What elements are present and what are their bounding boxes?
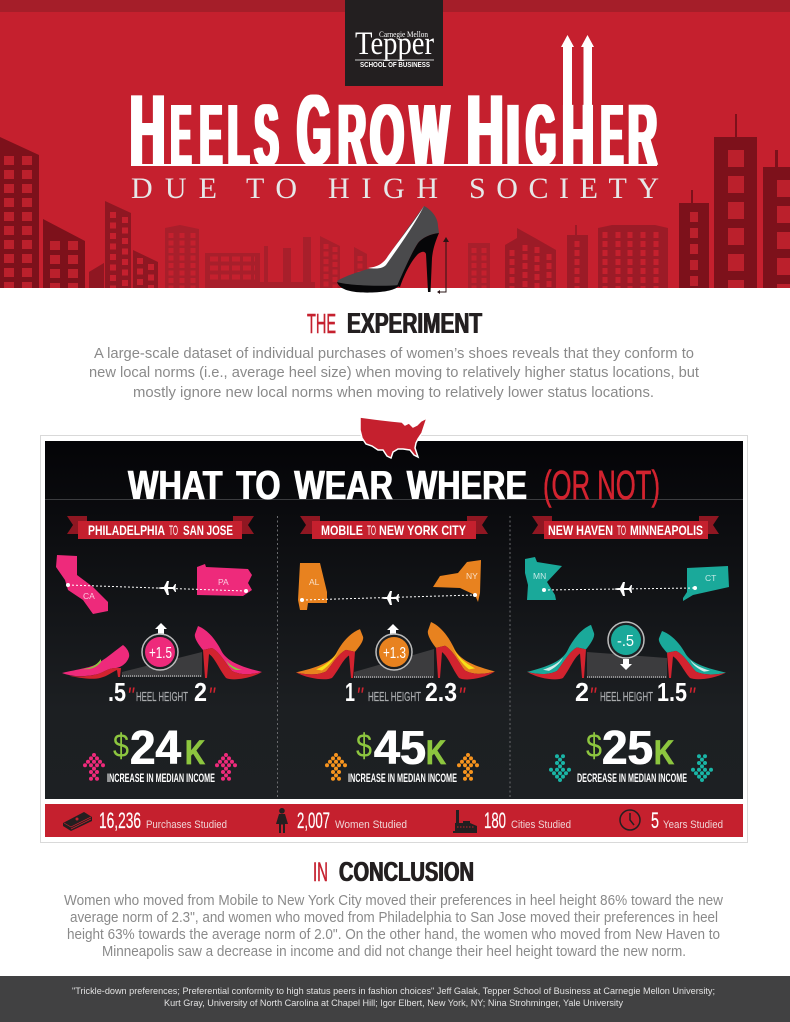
- text block: conclusion: average norm of 2.3", and women who moved from Philadelphia to San Jose moved their preferences in heel: [70, 910, 718, 926]
- title: Heels Grow Higher: E: [171, 87, 191, 184]
- stat: $25K decrease: K: [654, 734, 674, 772]
- stat: cities: 180: [484, 808, 506, 833]
- heel height: 2 to 1.5: 1.5: [657, 677, 687, 707]
- stat: $25K decrease: DECREASE IN MEDIAN INCOME: [577, 771, 687, 785]
- column 2: Mobile to New York City: [296, 516, 495, 785]
- icon: lower orange shoe: [296, 629, 363, 679]
- badge: +1.5: [142, 623, 178, 670]
- ribbon: New Haven to Minneapolis: MINNEAPOLIS: [630, 522, 703, 538]
- heading: In Conclusion: IN: [313, 857, 328, 887]
- ribbon: Mobile to New York City: MOBILE: [321, 522, 363, 538]
- footer: citation: Kurt Gray, University of North Carolina at Chapel Hill; Igor Elbert, New York, NY; Nina Strohminger, Yale University: [164, 998, 623, 1009]
- heel height: .5 to 2: 2: [194, 677, 207, 707]
- stat: $45K increase: INCREASE IN MEDIAN INCOME: [348, 771, 457, 785]
- icon: tall orange shoe: [428, 622, 495, 679]
- stat: $24K increase: 24: [130, 722, 181, 775]
- text block: conclusion: [64, 893, 723, 960]
- heel height: .5 to 2: ": [208, 683, 216, 710]
- stat: $45K increase: [327, 722, 477, 785]
- header banner: R: [628, 87, 657, 184]
- heel height: 2 to 1.5: [575, 677, 696, 710]
- chart: heel height ramp down: [587, 652, 667, 678]
- heel height: 1 to 2.3: 1: [345, 677, 355, 707]
- heel height: .5 to 2: .5: [108, 677, 126, 707]
- title: Heels Grow Higher: H: [467, 75, 504, 187]
- map: Alabama to New York route: [298, 560, 481, 610]
- heel height: .5 to 2: ": [127, 683, 135, 710]
- ribbon: Mobile to New York City: [300, 516, 488, 539]
- text block: experiment description: A large-scale dataset of individual purchases of women’s shoes reveals that they conform to: [94, 345, 694, 362]
- icon: tall pink shoe: [195, 626, 262, 679]
- map: Alabama to New York route: NY: [466, 571, 478, 581]
- text block: experiment description: new local norms (i.e., average heel size) when moving to relatively higher status locations, but: [89, 364, 700, 381]
- icon: double arrows rising from the H: [561, 35, 594, 165]
- footer: citation: [0, 976, 790, 1022]
- heel height: 2 to 1.5: ": [688, 683, 696, 710]
- chart: heel height ramp up: [354, 649, 434, 678]
- heading: In Conclusion: [313, 856, 474, 887]
- heel height: 2 to 1.5: ": [589, 683, 597, 710]
- ribbon: New Haven to Minneapolis: [532, 516, 719, 539]
- stat: $25K decrease: $: [586, 727, 602, 764]
- title: Heels Grow Higher: L: [228, 87, 249, 184]
- logo: Tepper School of Business: Carnegie Mellon: [379, 30, 428, 39]
- title: Heels Grow Higher: S: [254, 87, 278, 184]
- subtitle: DUE: [131, 172, 217, 205]
- header banner: [0, 0, 790, 288]
- badge: -.5: -.5: [617, 633, 634, 650]
- stat: $45K increase: $: [356, 727, 372, 764]
- icon: black high heel: [337, 206, 449, 294]
- title: Heels Grow Higher: R: [338, 87, 366, 184]
- icon: tall teal shoe: [527, 625, 594, 679]
- title: Heels Grow Higher: H: [130, 75, 165, 187]
- title: Heels Grow Higher: G: [297, 75, 331, 187]
- badge: +1.5: +1.5: [149, 645, 172, 662]
- stat: $24K increase: INCREASE IN MEDIAN INCOME: [107, 771, 215, 785]
- badge: -.5: [608, 622, 644, 670]
- badge: +1.3: [376, 624, 412, 670]
- ribbon: New Haven to Minneapolis: TO: [617, 522, 626, 538]
- heel height: 2 to 1.5: HEEL HEIGHT: [600, 690, 653, 704]
- column 3: New Haven to Minneapolis: [525, 516, 729, 785]
- footer: citation: "Trickle-down preferences; Preferential conformity to high status peers in fashion choices" Jeff Galak, Tepper School of Business at Carnegie Mellon University;: [72, 986, 715, 997]
- title: Heels Grow Higher: E: [200, 87, 222, 184]
- map: California to Pennsylvania route: PA: [218, 577, 229, 587]
- icon: stack of money: [63, 812, 92, 831]
- column 1: Philadelphia to San Jose: [56, 516, 262, 785]
- stat: $25K decrease: [551, 722, 711, 785]
- text block: conclusion: height 63% towards the average norm of 2.0". On the other hand, the women who moved from New Haven to: [67, 927, 720, 943]
- badge: +1.3: +1.3: [383, 645, 406, 662]
- map: California to Pennsylvania route: [56, 555, 252, 614]
- stats bar: [45, 804, 743, 837]
- heel height: 2 to 1.5: 2: [575, 677, 589, 707]
- icon: clock: [620, 810, 640, 830]
- title: Heels Grow Higher: H: [562, 87, 594, 184]
- stat: years: Years Studied: [663, 819, 723, 831]
- icon: low pink shoe: [62, 645, 129, 679]
- stat: women: [297, 808, 407, 833]
- stat: $24K increase: $: [113, 727, 129, 764]
- map: Connecticut to Minnesota route: CT: [705, 573, 716, 583]
- stat: purchases: [99, 808, 227, 833]
- stat: $25K decrease: 25: [602, 722, 653, 775]
- heel height: 1 to 2.3: HEEL HEIGHT: [368, 690, 421, 704]
- ribbon: Philadelphia to San Jose: TO: [169, 522, 178, 538]
- subtitle: SOCIETY: [469, 172, 659, 205]
- logo: Tepper School of Business: SCHOOL OF BUSINESS: [360, 62, 430, 69]
- stat: years: 5: [651, 808, 659, 833]
- subtitle: TO: [246, 172, 297, 205]
- heading: what to wear where (or not): (OR NOT): [543, 462, 660, 508]
- stat: women: Women Studied: [335, 819, 407, 831]
- logo: Tepper School of Business: [345, 0, 443, 86]
- heading: The Experiment: [307, 308, 482, 340]
- ribbon: Philadelphia to San Jose: SAN JOSE: [183, 522, 233, 538]
- stat: women: 2,007: [297, 808, 330, 833]
- panel: what to wear where: [40, 417, 748, 842]
- heading: In Conclusion: CONCLUSION: [339, 856, 474, 887]
- stat: $24K increase: [85, 722, 235, 785]
- icon: lower teal shoe: [659, 631, 726, 679]
- title: Heels Grow Higher: W: [410, 87, 449, 184]
- icon: woman: [276, 808, 288, 833]
- title: Heels Grow Higher: E: [601, 87, 623, 184]
- ribbon: Mobile to New York City: NEW YORK CITY: [379, 522, 467, 538]
- stat: years: [651, 808, 723, 833]
- heel height: .5 to 2: HEEL HEIGHT: [136, 690, 188, 704]
- subtitle: [131, 172, 659, 205]
- ribbon: Philadelphia to San Jose: [67, 516, 254, 539]
- text block: experiment description: mostly ignore new local norms when moving to relatively lower status locations.: [133, 384, 654, 401]
- map: Connecticut to Minnesota route: [525, 557, 729, 601]
- heading: The Experiment: THE: [307, 308, 336, 339]
- title: Heels Grow Higher: O: [370, 87, 404, 184]
- stat: purchases: Purchases Studied: [146, 819, 227, 831]
- heel height: 1 to 2.3: 2.3: [425, 677, 457, 707]
- ribbon: New Haven to Minneapolis: NEW HAVEN: [548, 522, 613, 538]
- text block: conclusion: Women who moved from Mobile to New York City moved their preferences in heel height 86% toward the new: [64, 893, 723, 909]
- stat: $45K increase: 45: [374, 722, 426, 775]
- text block: conclusion: Minneapolis saw a decrease in income and did not change their heel height toward the new norm.: [102, 944, 686, 960]
- map: Connecticut to Minnesota route: MN: [533, 571, 546, 581]
- stat: cities: Cities Studied: [511, 819, 571, 831]
- ribbon: Philadelphia to San Jose: PHILADELPHIA: [88, 522, 165, 538]
- stat: cities: [484, 808, 571, 833]
- chart: heel height ramp up: [122, 652, 202, 677]
- title: Heels Grow Higher: [130, 35, 657, 187]
- heading: The Experiment: EXPERIMENT: [347, 308, 482, 340]
- subtitle: HIGH: [328, 172, 438, 205]
- stat: $45K increase: K: [426, 734, 446, 772]
- title: Heels Grow Higher: G: [526, 87, 556, 184]
- heading: what to wear where (or not): WHAT TO WEAR WHERE: [128, 462, 527, 508]
- heel height: 1 to 2.3: ": [458, 683, 466, 710]
- stat: $24K increase: K: [185, 734, 205, 772]
- logo: Tepper School of Business: Tepper: [355, 26, 434, 62]
- text block: experiment description: [89, 345, 700, 401]
- map: Alabama to New York route: AL: [309, 577, 320, 587]
- heel height: 1 to 2.3: [345, 677, 466, 710]
- icon: factory: [453, 810, 477, 833]
- map: California to Pennsylvania route: CA: [83, 591, 95, 601]
- skyline: [0, 114, 790, 288]
- ribbon: Mobile to New York City: TO: [367, 522, 376, 538]
- icon: USA map: [360, 417, 427, 458]
- stat: purchases: 16,236: [99, 808, 141, 833]
- heel height: 1 to 2.3: ": [356, 683, 364, 710]
- title: Heels Grow Higher: I: [506, 87, 520, 184]
- heel height: .5 to 2: [108, 677, 216, 710]
